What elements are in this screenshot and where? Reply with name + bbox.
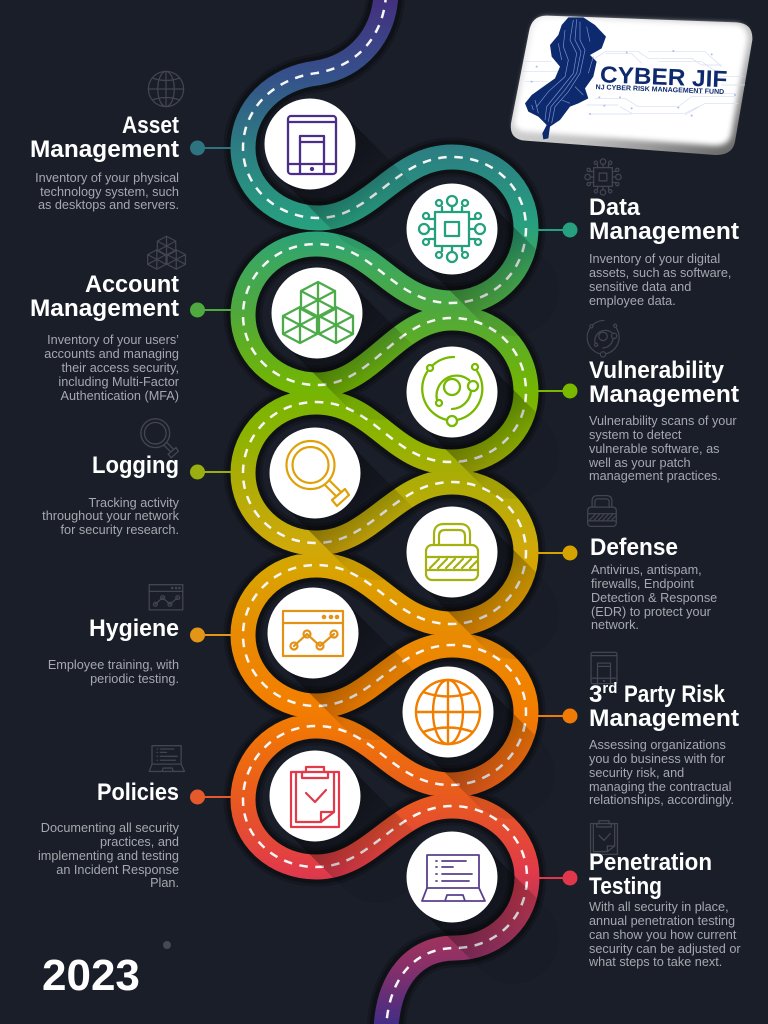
text: penetration description: security can be adjusted or — [589, 942, 741, 956]
icon: orbit — [587, 320, 619, 357]
circle: hygiene icon — [268, 588, 358, 678]
panel: third party risk management — [589, 652, 739, 807]
text: data description: employee data. — [589, 294, 676, 308]
text: vulnerability description: system to detect — [589, 428, 682, 442]
icon: laptop — [149, 746, 184, 771]
icon: browser chart — [149, 585, 183, 610]
text: penetration description: can show you how current — [589, 928, 737, 942]
circle: policies icon — [270, 750, 360, 842]
text: logging description: for security research. — [61, 523, 179, 537]
icon: chip — [585, 159, 621, 195]
text: asset description: Inventory of your physical — [35, 171, 179, 185]
long diagonal shadows — [310, 144, 514, 939]
heading: third party risk management: Management — [589, 705, 739, 732]
New Jersey shape — [525, 17, 606, 139]
text: account description: Authentication (MFA) — [61, 389, 179, 403]
decorative dot — [163, 941, 171, 949]
heading: third party risk management: Party Risk — [624, 681, 726, 708]
road: winding gradient path — [243, 0, 527, 1024]
text: vulnerability description: Vulnerability scans of your — [589, 414, 737, 428]
text: defense description: firewalls, Endpoint — [591, 577, 694, 591]
heading: penetration testing: Testing — [589, 873, 662, 900]
text: hygiene description: Employee training, with — [48, 658, 179, 672]
heading: data management: Management — [589, 218, 739, 245]
text: asset description: as desktops and servers. — [38, 198, 179, 212]
text: account description: accounts and managing — [44, 347, 179, 361]
panel: policies — [38, 746, 184, 890]
heading: logging: Logging — [92, 452, 179, 479]
icon: cubes — [148, 236, 185, 269]
circle: asset icon — [264, 98, 356, 190]
text: data description: Inventory of your digital — [589, 252, 720, 266]
text: third party description: relationships, accordingly. — [589, 793, 734, 807]
text: logging description: Tracking activity — [89, 496, 180, 510]
panel: defense — [588, 496, 717, 632]
text: hygiene description: periodic testing. — [90, 672, 179, 686]
logo text: CYBER JIF — [600, 61, 728, 92]
text: account description: including Multi-Factor — [58, 375, 180, 389]
text: vulnerability description: management practices. — [589, 469, 721, 483]
circle: penetration testing icon — [406, 832, 498, 922]
heading: account management: Management — [30, 295, 179, 322]
text: account description: Inventory of your users’ — [47, 333, 179, 347]
text: penetration description: With all security in place, — [589, 900, 729, 914]
text: policies description: Documenting all security — [41, 821, 180, 835]
heading: hygiene: Hygiene — [89, 615, 179, 642]
text: third party description: managing the contractual — [589, 780, 731, 794]
panel: logging — [42, 419, 180, 537]
circle: vulnerability icon — [406, 346, 498, 438]
icon: padlock — [588, 496, 616, 526]
panel: account management — [30, 236, 185, 403]
heading: third party risk management: rd — [602, 680, 617, 697]
panel: penetration testing — [588, 821, 741, 969]
heading: policies: Policies — [97, 779, 179, 806]
text: vulnerability description: well as your patch — [588, 456, 691, 470]
text: asset description: technology system, such — [40, 185, 179, 199]
connector lines and dots — [190, 140, 578, 886]
circuit lines — [522, 52, 745, 115]
panel: data management — [585, 159, 739, 308]
text: third party description: you do business with for — [589, 752, 726, 766]
text: account description: their access security, — [61, 361, 179, 375]
text: logging description: throughout your network — [42, 509, 180, 523]
text: third party description: Assessing organizations — [589, 738, 726, 752]
text: defense description: network. — [591, 618, 639, 632]
heading: vulnerability management: Vulnerability — [589, 357, 725, 384]
text: defense description: Detection & Response — [591, 591, 717, 605]
text: vulnerability description: vulnerable software, as — [589, 442, 719, 456]
text: policies description: implementing and testing — [38, 849, 179, 863]
text: defense description: (EDR) to protect your — [591, 605, 712, 619]
heading: defense: Defense — [590, 534, 678, 561]
circle: third party icon — [402, 666, 494, 758]
text: policies description: Plan. — [150, 876, 179, 890]
heading: penetration testing: Penetration — [589, 849, 712, 876]
icon: tablet — [591, 652, 617, 684]
text: data description: sensitive data and — [589, 280, 691, 294]
heading: data management: Data — [589, 194, 641, 221]
text: third party description: security risk, and — [589, 766, 684, 780]
text: policies description: an Incident Response — [56, 863, 179, 877]
panel: asset management — [30, 71, 184, 212]
circle: defense icon — [406, 506, 498, 598]
text: penetration description: annual penetration testing — [589, 914, 735, 928]
logo: Cyber JIF card — [511, 16, 752, 155]
heading: asset management: Asset — [122, 112, 179, 139]
text: data description: assets, such as software, — [589, 266, 731, 280]
heading: account management: Account — [85, 271, 179, 298]
logo text: NJ CYBER RISK MANAGEMENT FUND — [595, 84, 724, 96]
heading: third party risk management: 3 — [589, 681, 602, 708]
text: defense description: Antivirus, antispam, — [591, 563, 702, 577]
text: penetration description: what steps to take next. — [588, 955, 722, 969]
icon: globe — [148, 71, 184, 107]
circle: account icon — [272, 268, 362, 358]
year label: 2023 — [42, 951, 140, 1000]
icon: magnifier — [141, 419, 178, 458]
circle: logging icon — [270, 428, 360, 518]
heading: vulnerability management: Management — [589, 381, 739, 408]
icon: clipboard — [591, 821, 617, 854]
panel: hygiene — [48, 585, 183, 686]
panel: vulnerability management — [587, 320, 739, 483]
text: policies description: practices, and — [100, 835, 179, 849]
circle: data icon — [406, 184, 498, 274]
heading: asset management: Management — [30, 136, 179, 163]
